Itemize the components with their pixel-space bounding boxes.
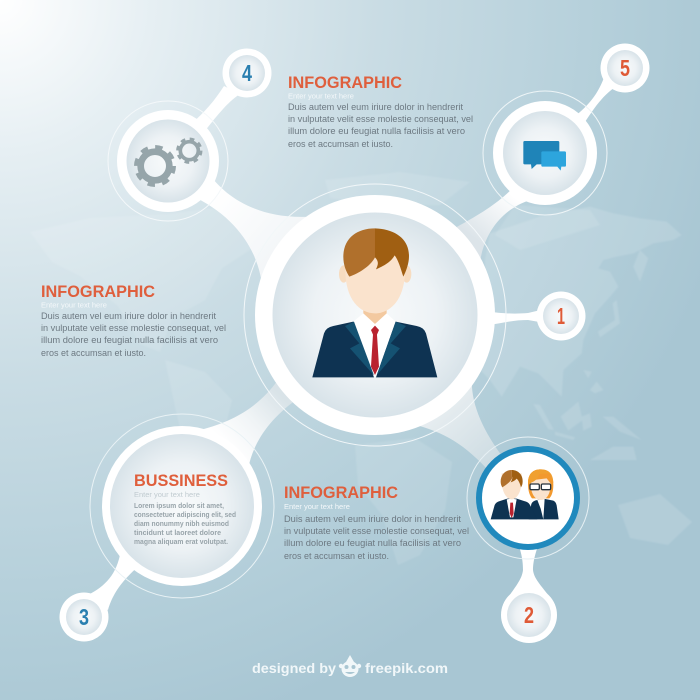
text block: bottom: Duis autem vel eum iriure dolor in hendrerit <box>284 514 462 524</box>
text block: bottom: in vulputate velit esse molestie consequat, vel <box>284 526 469 536</box>
number 4 badge: 4 <box>242 60 252 86</box>
number 5 badge: 5 <box>620 55 630 81</box>
text block: top: Enter your text here <box>288 92 354 100</box>
world map <box>30 172 692 565</box>
icon: freepik mascot <box>339 655 361 677</box>
text block: left: Duis autem vel eum iriure dolor in hendrerit <box>41 311 217 321</box>
number 1 badge: 1 <box>557 303 565 329</box>
business text: diam nonummy nibh euismod <box>134 519 229 528</box>
text block: top: eros et accumsan et iusto. <box>288 139 393 149</box>
footer credit: freepik.com <box>365 660 448 676</box>
text block: left: Enter your text here <box>41 300 107 310</box>
text block: top: Duis autem vel eum iriure dolor in hendrerit <box>288 102 464 112</box>
connector: gear to centre <box>190 172 318 285</box>
icon: chat bubbles <box>523 141 566 171</box>
text block: bottom: INFOGRAPHIC <box>284 484 398 502</box>
text block: top: in vulputate velit esse molestie consequat, vel <box>288 114 473 124</box>
text block: left: illum dolore eu feugiat nulla facilisis at vero <box>41 335 218 345</box>
connector: chat to number 5 <box>570 72 620 130</box>
icon: two colleagues <box>491 469 559 519</box>
connector: gear to number 4 <box>190 86 240 132</box>
connector: centre to people <box>412 376 505 472</box>
business text: tincidunt ut laoreet dolore <box>134 528 221 537</box>
text block: left: INFOGRAPHIC <box>41 283 155 301</box>
connector: people to number 2 <box>508 540 550 598</box>
number 3 badge: 3 <box>79 604 89 630</box>
footer credit: designed by <box>252 660 336 676</box>
text block: bottom: illum dolore eu feugiat nulla facilisis at vero <box>284 538 461 548</box>
connector: business to number 3 <box>86 555 140 610</box>
business text: Lorem ipsum dolor sit amet, <box>134 501 224 510</box>
business subheading: Enter your text here <box>134 490 200 499</box>
number 2 badge: 2 <box>524 602 534 628</box>
people circle <box>467 437 589 559</box>
connector: centre to number 1 <box>485 309 545 326</box>
number 5 badge <box>600 44 650 92</box>
business heading: BUSSINESS <box>134 472 228 490</box>
business text: magna aliquam erat volutpat. <box>134 537 228 546</box>
gear circle <box>108 101 228 221</box>
icon: businessman <box>312 228 437 377</box>
connector: chat to centre <box>455 180 530 262</box>
text block: left <box>41 283 226 358</box>
number 4 badge <box>222 48 272 98</box>
business text: consectetuer adipiscing elit, sed <box>134 510 236 519</box>
text block: top: INFOGRAPHIC <box>288 74 402 92</box>
central circle <box>244 184 506 446</box>
icon: gears <box>136 139 201 185</box>
text block: left: in vulputate velit esse molestie consequat, vel <box>41 323 226 333</box>
connector: centre to business <box>200 380 296 470</box>
text block: bottom <box>284 484 469 561</box>
business text <box>134 501 236 546</box>
chat circle <box>483 91 607 215</box>
footer credit <box>252 655 448 677</box>
text block: top: illum dolore eu feugiat nulla facilisis at vero <box>288 126 465 136</box>
number 2 badge <box>501 587 557 643</box>
business circle <box>90 414 274 598</box>
number 1 badge <box>536 292 586 340</box>
text block: top <box>288 74 473 149</box>
text block: left: eros et accumsan et iusto. <box>41 348 146 358</box>
number 3 badge <box>60 592 108 642</box>
text block: bottom: eros et accumsan et iusto. <box>284 551 389 561</box>
text block: bottom: Enter your text here <box>284 502 350 511</box>
